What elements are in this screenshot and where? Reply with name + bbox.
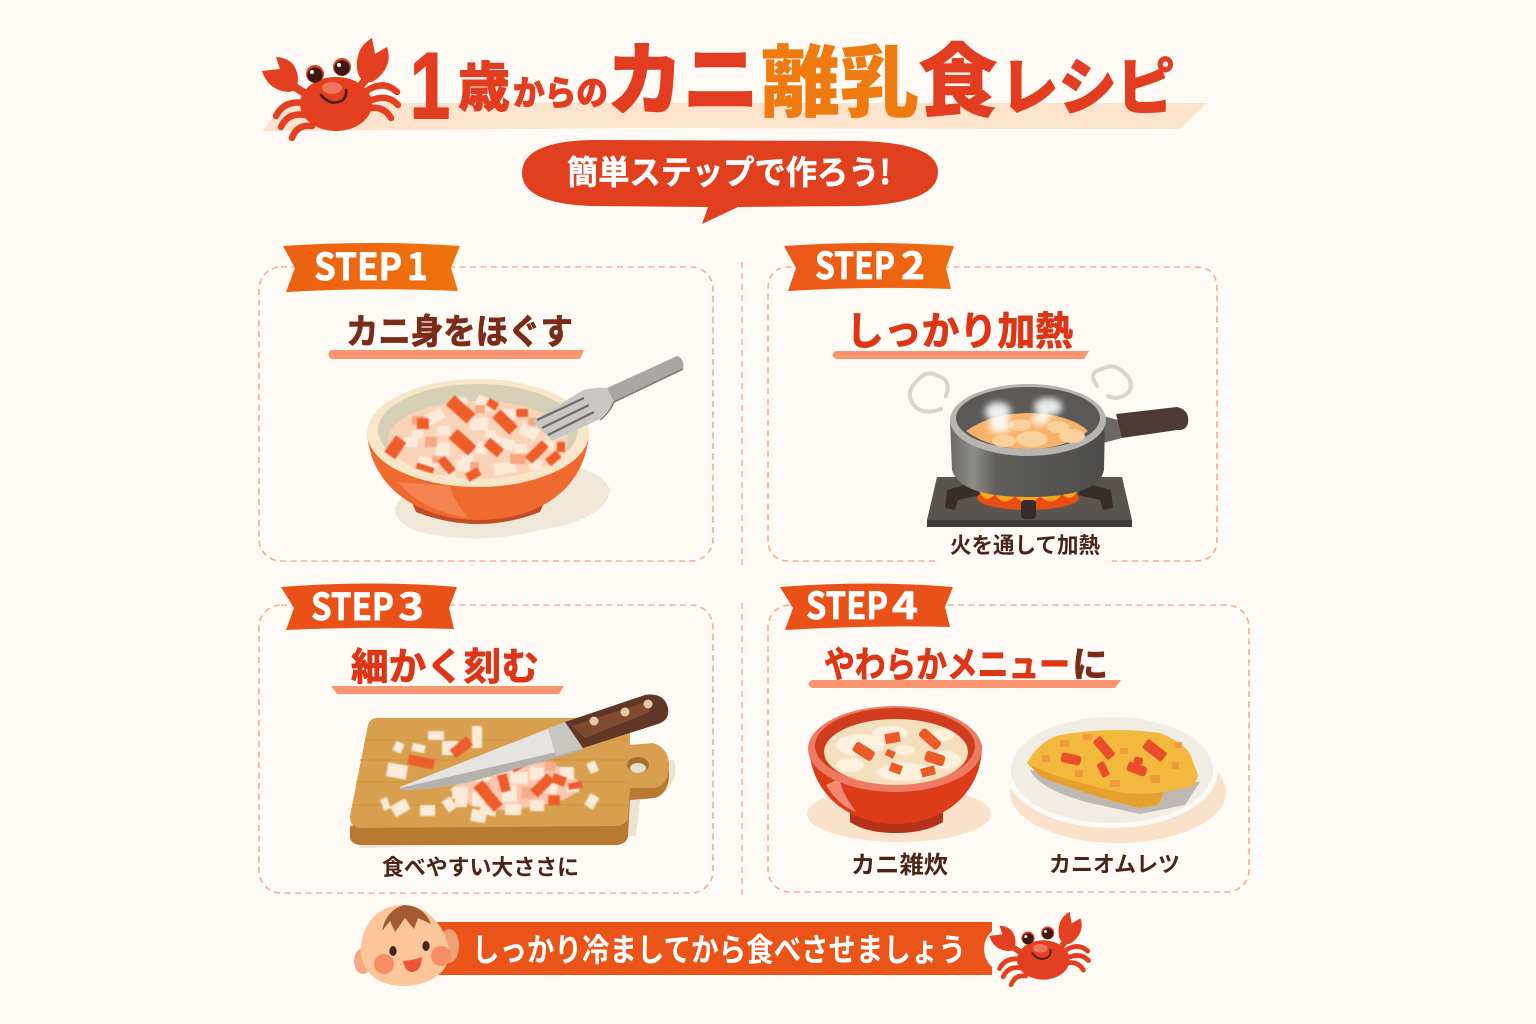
dashed column divider top — [741, 262, 743, 566]
steam clouds — [910, 373, 948, 412]
subtitle speech bubble: 簡単ステップで作ろう! — [567, 146, 891, 194]
panel border — [768, 267, 1217, 561]
step 1 ribbon: STEP — [314, 237, 402, 291]
step 3 ribbon: 3 — [398, 577, 424, 631]
illustration: cutting board with knife — [350, 695, 675, 848]
icon: small crab — [989, 912, 1089, 985]
panel: step 4 — [768, 576, 1249, 892]
bottom advice banner — [354, 905, 1089, 986]
icon: crab mascot — [262, 38, 398, 138]
step 4 heading: に — [1072, 636, 1108, 688]
icon: baby face — [354, 905, 459, 986]
panel: step 2 — [768, 236, 1217, 561]
title text: 離乳 — [761, 39, 919, 127]
title text: 食 — [918, 38, 998, 127]
step 4 ribbon — [780, 576, 953, 630]
pot handle — [1103, 416, 1122, 443]
chopped crab pile — [380, 726, 599, 823]
step 2 ribbon: 2 — [901, 236, 925, 290]
caption: crab porridge: カニ雑炊 — [851, 845, 948, 880]
title block — [262, 33, 1207, 138]
title text: 歳 — [458, 59, 510, 118]
illustration: pot on stove — [910, 366, 1188, 527]
step 4 ribbon: STEP — [806, 576, 888, 630]
scattered pieces — [380, 726, 599, 823]
illustration: bowl of crab meat with fork — [367, 356, 683, 539]
step 1 heading: カニ身をほぐす — [346, 304, 573, 355]
panel: step 1 — [259, 237, 713, 561]
title highlight band — [262, 103, 1207, 131]
step 3 caption: 食べやすい大ささに — [382, 850, 579, 882]
illustration: crab omelette on plate — [1006, 714, 1226, 843]
stove — [927, 477, 1132, 520]
cutting board — [350, 762, 669, 845]
step 2 heading: しっかり加熱 — [846, 301, 1073, 357]
banner text: しっかり冷ましてから食べさせましょう — [472, 925, 966, 971]
banner ribbon — [430, 922, 992, 975]
step 3 ribbon — [281, 577, 457, 631]
step 4 heading: やわらかメニュー — [824, 636, 1070, 688]
subtitle speech bubble — [522, 140, 938, 224]
illustration: crab rice porridge bowl — [807, 706, 991, 842]
caption: crab omelette: カニオムレツ — [1049, 847, 1180, 879]
title text — [410, 33, 1175, 138]
title text: レシピ — [1000, 54, 1175, 123]
step 1 ribbon: 1 — [407, 237, 428, 291]
title text: からの — [513, 75, 608, 113]
panel border — [768, 605, 1249, 892]
title text: 1 — [410, 33, 450, 138]
panel border — [259, 267, 713, 561]
panel: step 3 — [259, 577, 713, 893]
fork — [533, 356, 683, 441]
white notch behind crab — [984, 925, 1032, 973]
step 2 ribbon: STEP — [815, 236, 895, 290]
step 1 ribbon — [283, 237, 460, 292]
step 2 ribbon — [784, 236, 954, 291]
step 4 ribbon: 4 — [892, 576, 918, 630]
title text: カニ — [607, 36, 759, 125]
step 3 ribbon: STEP — [311, 577, 394, 631]
flames — [977, 486, 1079, 510]
knife — [400, 695, 668, 790]
pot body — [950, 420, 1105, 497]
panel border — [259, 605, 713, 893]
step 3 heading: 細かく刻む — [351, 636, 539, 691]
step 2 caption: 火を通して加熱 — [950, 528, 1100, 560]
crab meat pieces — [384, 394, 565, 482]
dashed column divider bottom — [741, 603, 743, 896]
soup — [966, 413, 1088, 449]
